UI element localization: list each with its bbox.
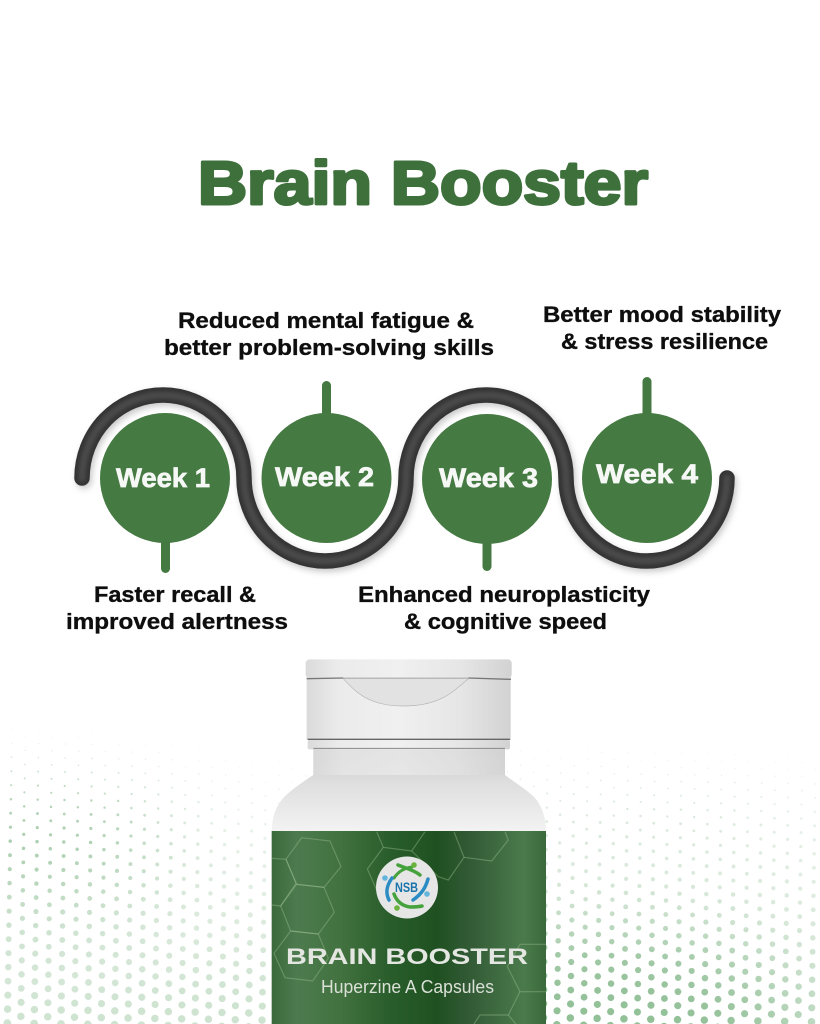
week 3 caption bbox=[358, 582, 651, 634]
week 4 caption: Better mood stability bbox=[543, 302, 782, 327]
week 1 caption: improved alertness bbox=[66, 609, 288, 634]
week 1 node: Week 1 bbox=[116, 463, 210, 493]
icon: NSB logo bbox=[376, 856, 438, 918]
background halftone dots bbox=[0, 729, 820, 1024]
timeline: weeks bbox=[82, 377, 729, 573]
week 4 caption bbox=[543, 302, 782, 354]
week 1 caption: Faster recall & bbox=[94, 582, 256, 607]
week 3 node bbox=[422, 414, 552, 571]
serpentine line bbox=[82, 395, 729, 564]
week 3 caption: & cognitive speed bbox=[404, 609, 607, 634]
week 1 caption bbox=[66, 582, 288, 634]
week 3 caption: Enhanced neuroplasticity bbox=[358, 582, 651, 607]
title: Brain Booster bbox=[198, 149, 648, 217]
week 4 node bbox=[582, 377, 712, 543]
week 2 caption: Reduced mental fatigue & bbox=[178, 308, 474, 333]
green label bbox=[272, 831, 546, 1024]
week 2 caption bbox=[164, 308, 494, 360]
week 4 node: Week 4 bbox=[596, 459, 698, 489]
week 3 node: Week 3 bbox=[439, 463, 538, 493]
icon: NSB logo: NSB bbox=[395, 879, 418, 895]
week 4 caption: & stress resilience bbox=[561, 329, 768, 354]
label subtitle: Huperzine A Capsules bbox=[321, 977, 494, 997]
week 2 node: Week 2 bbox=[275, 462, 374, 492]
week 1 node bbox=[100, 413, 230, 573]
product bottle bbox=[272, 659, 546, 1024]
bottle cap bbox=[306, 659, 512, 749]
bottle body and neck bbox=[272, 749, 546, 832]
week 2 caption: better problem-solving skills bbox=[164, 335, 494, 360]
label product name: BRAIN BOOSTER bbox=[286, 944, 528, 969]
week 2 node bbox=[262, 381, 392, 543]
